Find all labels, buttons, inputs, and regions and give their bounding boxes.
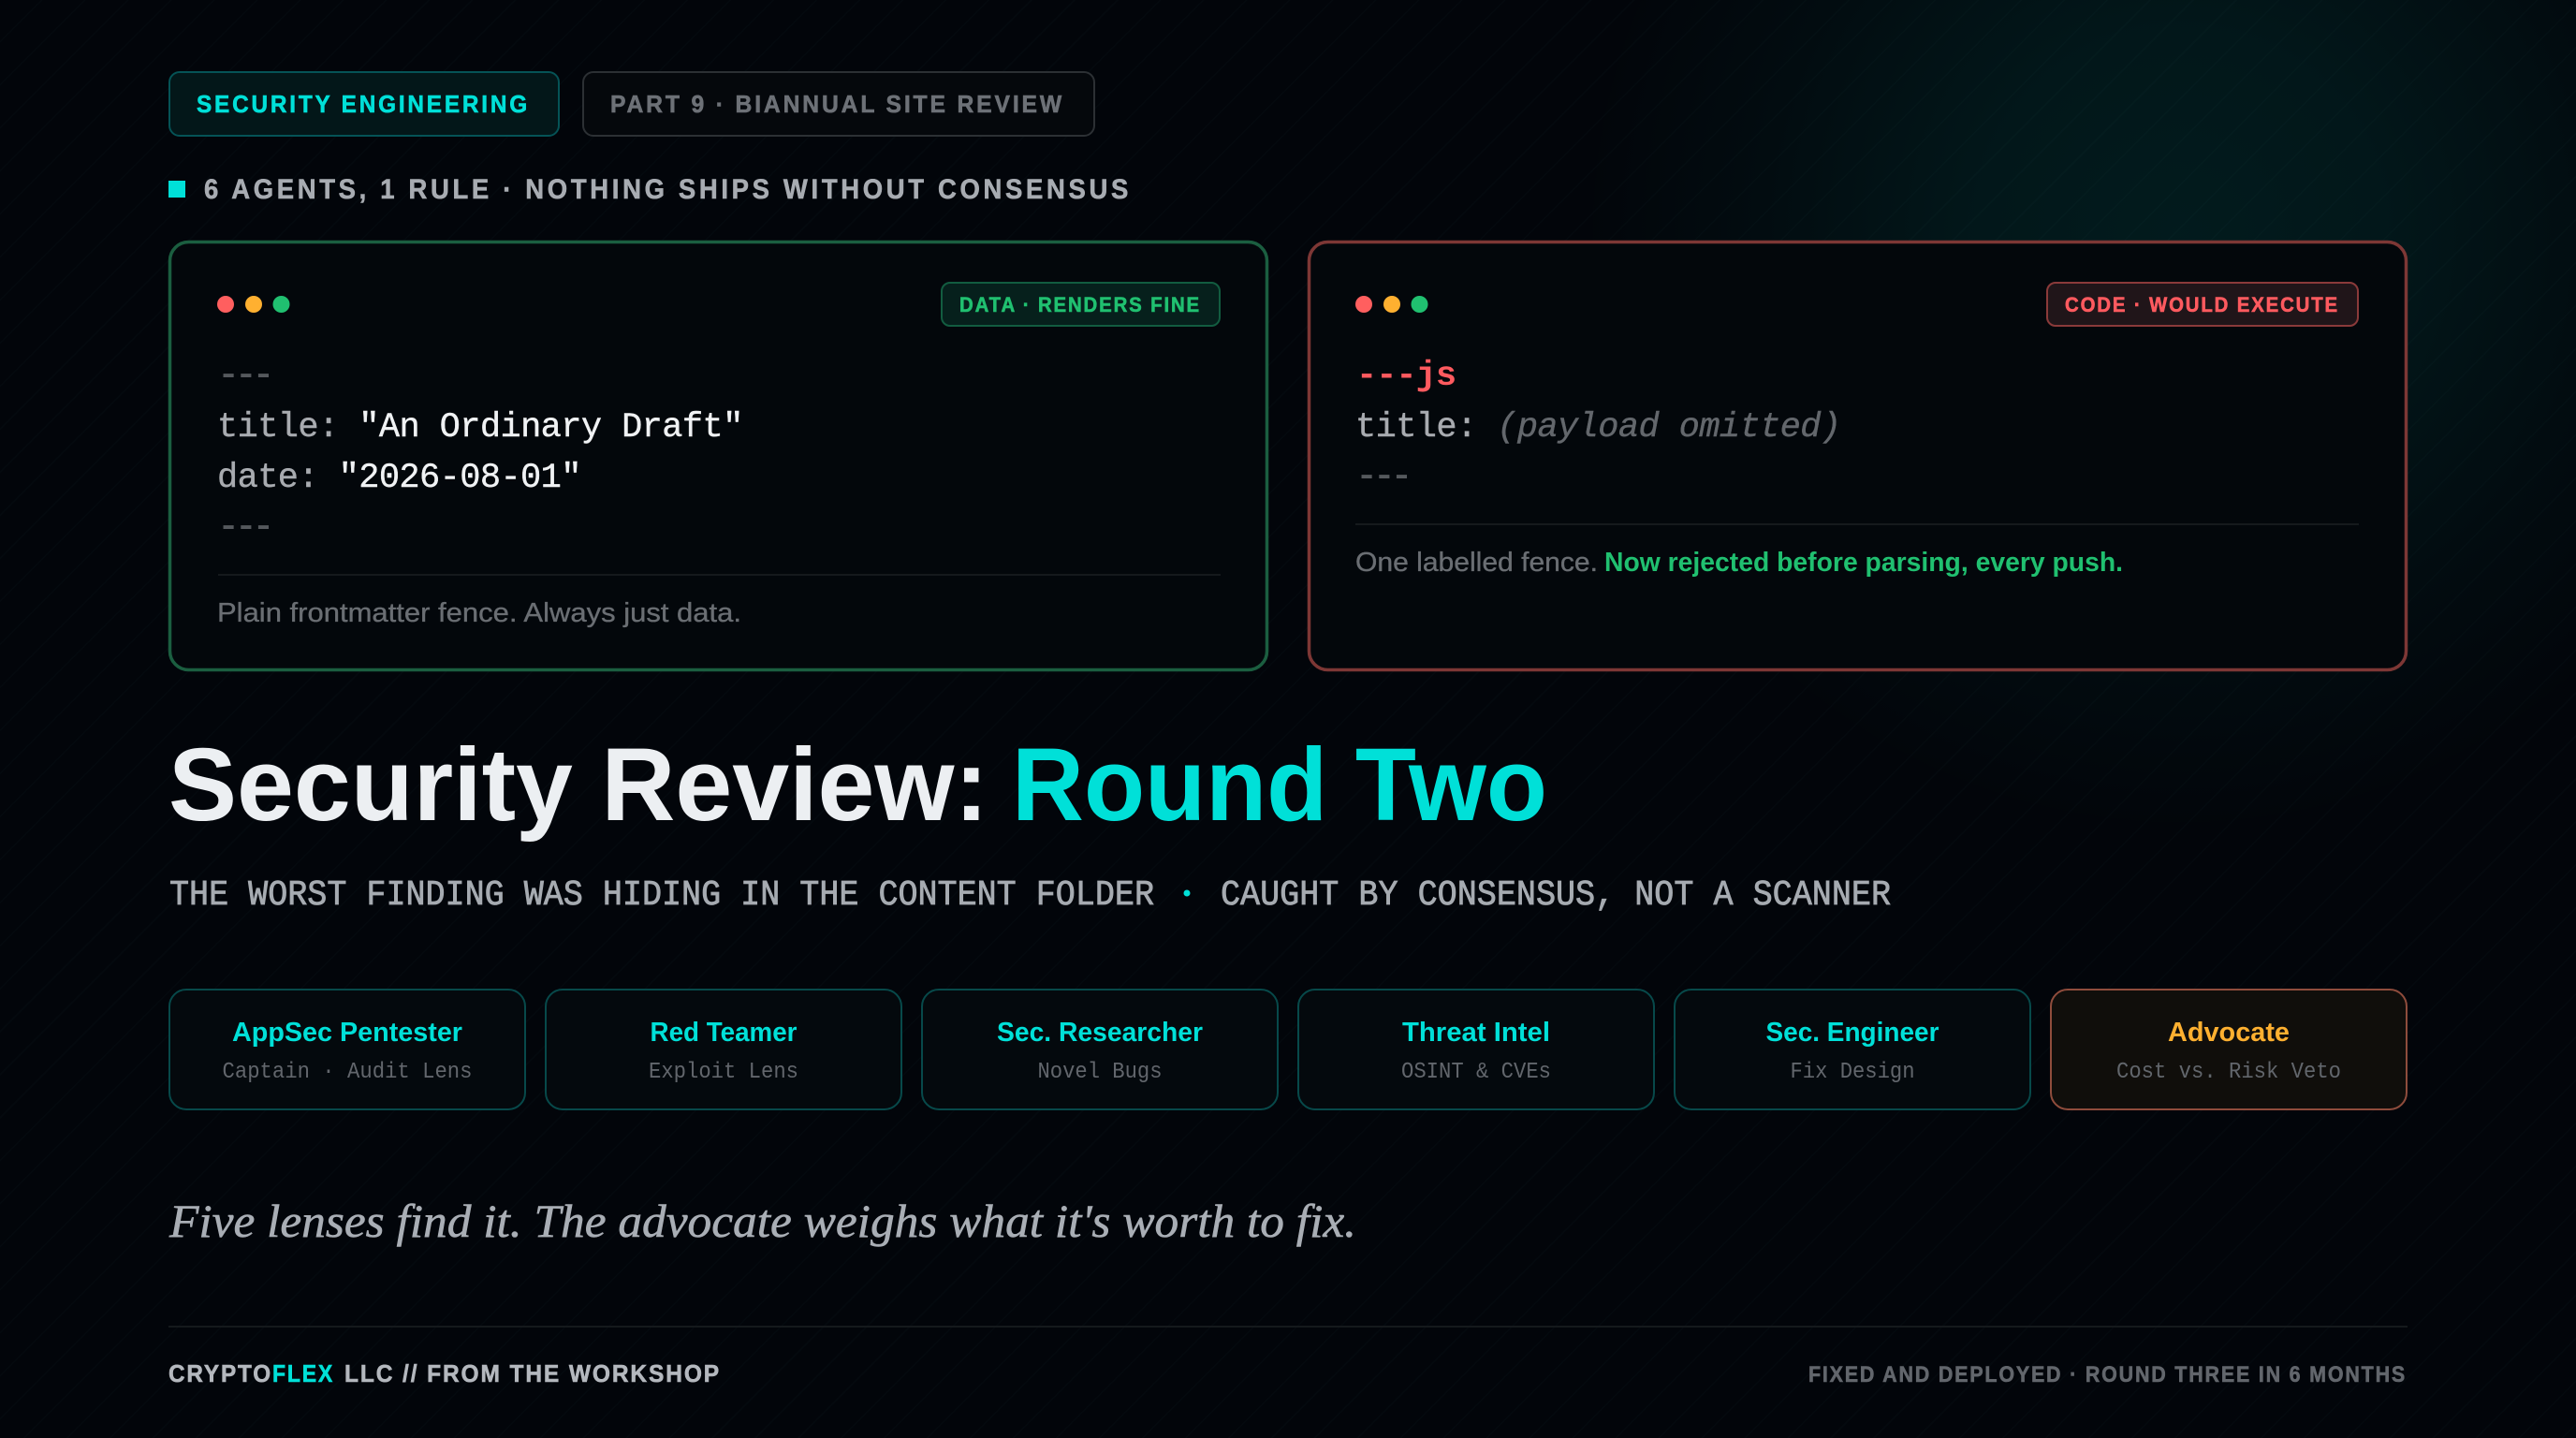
agent card: Advocate: Cost vs. Risk Veto xyxy=(2116,1060,2341,1085)
agent card: Red Teamer: Exploit Lens xyxy=(649,1060,798,1085)
footer right: status: FIXED AND DEPLOYED · ROUND THREE IN 6 MONTHS xyxy=(1808,1362,2407,1387)
footer left: brand: FLEX xyxy=(272,1359,334,1387)
agent card: Red Teamer: Red Teamer xyxy=(650,1018,798,1048)
agent card: Advocate xyxy=(2051,990,2407,1109)
code block: frontmatter xyxy=(217,357,743,548)
header pill: security engineering xyxy=(169,72,559,136)
footer left: brand xyxy=(168,1359,721,1387)
header pill: part 9: PART 9 · BIANNUAL SITE REVIEW xyxy=(610,90,1064,118)
code block: frontmatter: date: "2026-08-01" xyxy=(217,459,581,498)
title xyxy=(168,727,1547,843)
window dots xyxy=(1355,296,1428,313)
badge: data renders fine: DATA · RENDERS FINE xyxy=(959,293,1201,316)
code block: frontmatter: title: "An Ordinary Draft" xyxy=(217,408,743,448)
title: Round Two xyxy=(1012,727,1547,843)
caption: rejected before parsing: One labelled fence. xyxy=(1355,548,1598,578)
agent card: Sec. Engineer: Sec. Engineer xyxy=(1765,1018,1939,1048)
agent card: Sec. Engineer xyxy=(1675,990,2030,1109)
subtitle: THE WORST FINDING WAS HIDING IN THE CONTENT FOLDER xyxy=(169,875,1154,916)
footer left: brand: LLC // FROM THE WORKSHOP xyxy=(344,1359,721,1387)
subtitle: CAUGHT BY CONSENSUS, NOT A SCANNER xyxy=(1221,875,1891,916)
agent card: Sec. Researcher: Sec. Researcher xyxy=(997,1018,1203,1048)
code block: frontmatter: --- xyxy=(218,357,271,396)
agent card: AppSec Pentester: Captain · Audit Lens xyxy=(223,1060,472,1085)
panel: labelled js fence xyxy=(1309,242,2406,670)
badge: code would execute: CODE · WOULD EXECUTE xyxy=(2065,293,2339,316)
code block: js fence xyxy=(1355,357,1840,497)
code block: js fence: title: (payload omitted) xyxy=(1355,408,1840,448)
agent card: Sec. Researcher: Novel Bugs xyxy=(1037,1060,1163,1085)
caption: plain fence: Plain frontmatter fence. Always just data. xyxy=(217,598,741,628)
panel: plain frontmatter data xyxy=(170,242,1267,670)
agent card: Threat Intel: OSINT & CVEs xyxy=(1401,1060,1551,1085)
kicker line with square marker: 6 AGENTS, 1 RULE · NOTHING SHIPS WITHOUT CONSENSUS xyxy=(204,174,1132,205)
footer left: brand: CRYPTO xyxy=(168,1359,272,1387)
header pill: part 9 xyxy=(583,72,1094,136)
agent card: Sec. Engineer: Fix Design xyxy=(1790,1060,1915,1085)
agent card: AppSec Pentester xyxy=(169,990,525,1109)
header pill: security engineering: SECURITY ENGINEERING xyxy=(197,90,530,118)
tagline quote: Five lenses find it. The advocate weighs what it's worth to fix. xyxy=(168,1195,1356,1247)
subtitle xyxy=(169,875,1891,916)
window dots xyxy=(217,296,290,313)
caption: rejected before parsing xyxy=(1355,548,2123,578)
agent card: Threat Intel xyxy=(1298,990,1654,1109)
badge: data renders fine xyxy=(942,283,1220,326)
caption: rejected before parsing: Now rejected before parsing, every push. xyxy=(1604,548,2123,578)
agent card: Red Teamer xyxy=(546,990,901,1109)
agent card: AppSec Pentester: AppSec Pentester xyxy=(232,1018,462,1048)
agent card: Threat Intel: Threat Intel xyxy=(1402,1018,1550,1048)
code block: frontmatter: --- xyxy=(218,508,271,548)
agent card: Sec. Researcher xyxy=(922,990,1278,1109)
code block: js fence: ---js xyxy=(1356,357,1456,396)
agent card: Advocate: Advocate xyxy=(2168,1018,2290,1048)
badge: code would execute xyxy=(2047,283,2358,326)
code block: js fence: --- xyxy=(1356,458,1409,497)
title: Security Review: xyxy=(168,727,988,843)
